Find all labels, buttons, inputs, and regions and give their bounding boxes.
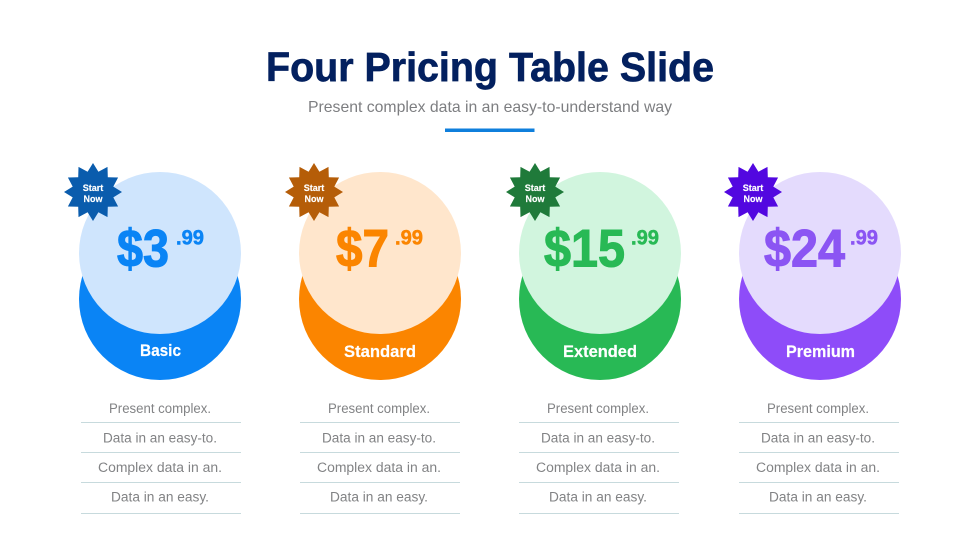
plan name: premium: Premium [786,342,855,361]
feature list: basic: Data in an easy-to. [103,430,217,446]
cents: extended: .99 [631,226,659,250]
feature list: extended: Complex data in an. [536,460,660,475]
cents: premium: .99 [850,226,878,250]
light circle: extended [519,172,681,334]
badge: start now premium: Start [743,183,763,193]
price: basic: $3 [117,220,169,278]
feature list: extended: Data in an easy-to. [541,430,655,446]
accent rule [445,128,534,132]
light circle: premium [739,172,901,334]
feature list: standard: Data in an easy. [330,490,428,504]
cents: standard: .99 [395,226,423,250]
badge: start now basic [64,163,122,221]
feature list: basic [81,401,241,514]
badge: start now extended: Now [526,194,545,204]
plan name: basic: Basic [140,341,181,360]
dark circle: standard [299,218,461,380]
badge: start now extended [506,163,564,221]
price: extended: $15 [544,220,625,278]
badge: start now standard: Now [304,194,324,204]
badge: start now premium [724,163,782,221]
cents: basic: .99 [176,226,204,250]
badge: start now extended: Start [525,183,545,193]
feature list: extended: Present complex. [547,401,649,416]
badge: start now standard [285,163,343,221]
feature list: standard [300,401,460,514]
feature list: standard: Present complex. [328,401,430,416]
title: Four Pricing Table Slide [266,44,714,90]
dark circle: extended [519,218,681,380]
feature list: premium: Complex data in an. [756,460,880,475]
feature list: premium: Present complex. [767,401,869,416]
feature list: basic: Present complex. [109,401,211,416]
feature list: premium: Data in an easy-to. [761,430,875,446]
price: standard: $7 [336,220,389,278]
feature list: standard: Complex data in an. [317,460,441,475]
feature list: standard: Data in an easy-to. [322,430,436,446]
badge: start now basic: Now [84,194,103,204]
light circle: standard [299,172,461,334]
price: premium: $24 [764,220,845,278]
feature list: premium: Data in an easy. [769,490,867,504]
panel: basic plan [64,163,241,514]
panel: premium plan [724,163,901,514]
badge: start now standard: Start [304,183,324,193]
light circle: basic [79,172,241,334]
feature list: basic: Data in an easy. [111,490,209,504]
plan name: standard: Standard [344,342,416,361]
subtitle: Present complex data in an easy-to-understand way [308,99,672,116]
badge: start now basic: Start [83,183,103,193]
plan name: extended: Extended [563,342,637,361]
dark circle: premium [739,218,901,380]
panel: standard plan [285,163,461,514]
feature list: premium [739,401,899,514]
badge: start now premium: Now [744,194,763,204]
feature list: extended: Data in an easy. [549,490,647,504]
feature list: extended [519,401,679,514]
feature list: basic: Complex data in an. [98,460,222,475]
panel: extended plan [506,163,681,514]
dark circle: basic [79,218,241,380]
